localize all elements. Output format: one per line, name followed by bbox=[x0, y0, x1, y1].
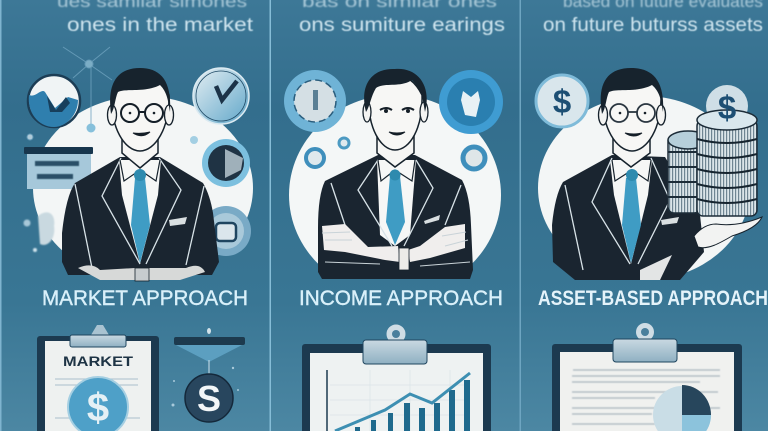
panel: asset-based approach bbox=[536, 0, 768, 431]
smile bbox=[625, 133, 642, 136]
glasses bbox=[121, 104, 163, 122]
description text: income bbox=[299, 0, 505, 36]
icon: coin stacks: $ bbox=[718, 89, 736, 126]
icon: dollar coin bbox=[536, 75, 588, 127]
white backdrop circle bbox=[33, 96, 253, 280]
pie chart bbox=[653, 386, 711, 431]
jacket bbox=[62, 157, 219, 275]
ears bbox=[598, 105, 608, 125]
clipboard: market: MARKET bbox=[63, 354, 134, 369]
white backdrop circle bbox=[289, 99, 501, 264]
person: asset-based bbox=[552, 68, 762, 280]
smile bbox=[133, 132, 150, 136]
panel: market approach bbox=[24, 0, 254, 431]
description text: income: ons sumiture earings bbox=[299, 15, 505, 36]
hair bbox=[364, 69, 427, 112]
collar bbox=[612, 160, 651, 181]
description text: market: ones in the market bbox=[67, 14, 254, 36]
bars bbox=[355, 380, 470, 431]
description text: asset-based: on future buturss assets bbox=[543, 15, 763, 36]
icon: dollar coin: $ bbox=[553, 83, 571, 120]
tie bbox=[131, 178, 150, 263]
clipboard: income with growth chart bbox=[302, 325, 491, 431]
eyes bbox=[380, 108, 414, 110]
icon: clock badge bbox=[284, 70, 346, 132]
lapels bbox=[75, 158, 204, 268]
clipboard: market bbox=[37, 325, 159, 431]
jacket bbox=[318, 155, 473, 279]
glasses bbox=[610, 104, 655, 122]
collar bbox=[120, 160, 160, 181]
icon: pie badge bbox=[202, 139, 250, 187]
icon: coin stacks bbox=[668, 85, 757, 216]
heading: market approach: MARKET APPROACH bbox=[42, 287, 248, 310]
shirt bbox=[377, 160, 416, 246]
small stack bbox=[668, 135, 700, 213]
white backdrop circle bbox=[538, 96, 750, 280]
pocket square bbox=[424, 215, 440, 224]
shirt bbox=[119, 160, 161, 264]
icon: check badge bbox=[193, 68, 249, 124]
jacket bbox=[552, 155, 704, 280]
icon: calendar bbox=[24, 147, 93, 189]
collar bbox=[378, 160, 415, 181]
hand bbox=[694, 217, 762, 248]
ears bbox=[108, 105, 116, 125]
description text: asset-based bbox=[543, 0, 763, 36]
lapels bbox=[331, 160, 461, 246]
icon: currency badge bbox=[439, 70, 503, 134]
icon: chart badge bbox=[28, 75, 80, 127]
ears bbox=[363, 102, 371, 122]
smile bbox=[389, 132, 405, 135]
hair bbox=[601, 68, 663, 114]
tie bbox=[386, 176, 405, 245]
neck and face bbox=[613, 130, 650, 167]
tie bbox=[622, 178, 641, 263]
clip bbox=[387, 325, 405, 343]
description text: market bbox=[57, 0, 254, 36]
top dollar coin bbox=[706, 85, 748, 127]
bottom hands bbox=[640, 255, 672, 280]
lapels bbox=[565, 158, 670, 270]
text lines bbox=[572, 370, 720, 424]
pocket square bbox=[169, 217, 187, 226]
icon: faded portrait bbox=[24, 212, 54, 252]
network decoration bbox=[27, 47, 198, 144]
pocket square bbox=[661, 217, 679, 225]
neck and face bbox=[377, 128, 414, 167]
large stack bbox=[697, 120, 757, 216]
clipboard: asset-based with pie chart bbox=[552, 323, 742, 431]
icon: lock badge bbox=[201, 206, 251, 256]
person: income bbox=[318, 69, 473, 279]
hair bbox=[110, 68, 170, 114]
clipboard: market: $ bbox=[87, 386, 109, 430]
crossed arms bbox=[322, 224, 400, 262]
panel: income approach bbox=[284, 0, 505, 431]
person: market bbox=[62, 68, 219, 281]
icon: funnel with dollar coin bbox=[172, 328, 245, 422]
neck and face bbox=[122, 130, 158, 168]
decorative rings bbox=[306, 138, 485, 169]
heading: income approach: INCOME APPROACH bbox=[299, 287, 503, 310]
forearms bbox=[78, 265, 205, 280]
icon: funnel with dollar coin: S bbox=[197, 378, 221, 419]
shirt bbox=[610, 160, 652, 264]
